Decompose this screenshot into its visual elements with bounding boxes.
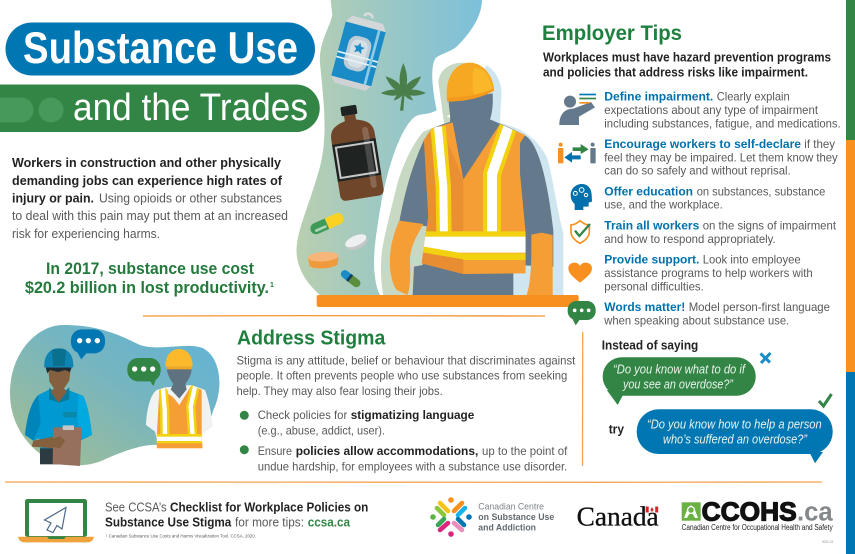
tip: define impairment: Clearly explain: [717, 91, 790, 104]
stigma definition: people. It often prevents people who use substances from seeking: [236, 369, 567, 383]
logo: CCSA: and Addiction: [478, 522, 536, 533]
bullet: check policies: Check policies for: [258, 408, 347, 422]
heading: address stigma: Address Stigma: [237, 327, 386, 349]
logo: CCOHS: .ca: [797, 499, 834, 527]
logo: Canada wordmark: Canada: [577, 502, 659, 532]
footer call to action: [105, 500, 368, 530]
tip: train all workers: Train all workers: [604, 220, 699, 233]
icon: presenter: [559, 94, 596, 125]
speech bubble: what not to say: you see an overdose?”: [622, 377, 734, 391]
label: instead of saying: Instead of saying: [602, 338, 698, 352]
person in safety vest: [146, 349, 213, 450]
speech bubble: what to say: “Do you know how to help a person: [647, 418, 822, 432]
side colour bar: [846, 0, 855, 554]
icon: green check: [819, 394, 832, 406]
statistic callout: 1: [270, 282, 274, 289]
icon: cannabis leaf: [381, 63, 426, 111]
speech bubble: what to say: who’s suffered an overdose?”: [663, 432, 808, 446]
illustration: worker with substances: [297, 0, 579, 307]
intro paragraph: Using opioids or other substances: [99, 190, 282, 206]
safety vest: [420, 120, 530, 277]
tip: words matter: Model person-first language: [689, 301, 830, 314]
intro paragraph: [12, 155, 288, 241]
tip: provide support: Provide support.: [604, 254, 699, 267]
CCSA mark: [430, 497, 472, 537]
tip: words matter: [568, 301, 830, 327]
tip: define impairment: expectations about any type of impairment: [604, 104, 819, 117]
work table: [317, 295, 579, 307]
title: substance use: Substance Use: [23, 24, 298, 73]
bullet: ensure policies: up to the point of: [482, 444, 568, 458]
intro paragraph: injury or pain.: [12, 190, 94, 206]
tip: self-declare: can do so safely and without reprisal.: [604, 165, 791, 178]
icon: heart: [568, 263, 592, 283]
speech bubble: green: [127, 358, 161, 386]
worker halo: green: [381, 63, 473, 295]
tip: define impairment: [559, 91, 841, 130]
bullet: ensure policies: undue hardship, for employees with a substance use disorder.: [258, 459, 567, 473]
bullet: ensure policies: Ensure: [258, 444, 292, 458]
tip: words matter: when speaking about substance use.: [603, 314, 789, 327]
statistic callout: In 2017, substance use cost: [46, 260, 254, 278]
logo: CCOHS: CCOHS: [702, 499, 797, 527]
stigma definition: help. They may also fear losing their jobs.: [236, 384, 443, 398]
tip: offer education: Offer education: [604, 185, 693, 198]
logo: CCSA: [430, 497, 554, 537]
icon: pills: [307, 211, 369, 289]
tip: self-declare: Encourage workers to self-declare: [604, 138, 802, 151]
illustration: two workers talking: [10, 325, 219, 466]
stigma definition: Stigma is any attitude, belief or behaviour that discriminates against: [236, 353, 576, 367]
tip: define impairment: Define impairment.: [604, 91, 713, 104]
employer tips intro: [543, 50, 831, 80]
tip: define impairment: including substances, fatigue, and medications.: [604, 117, 841, 130]
tip: words matter: Words matter!: [604, 301, 685, 314]
statistic callout: $20.2 billion in lost productivity.: [25, 279, 269, 297]
title: and the trades: and the Trades: [73, 87, 308, 129]
footer call to action: for more tips:: [235, 516, 304, 530]
tip: provide support: [568, 254, 813, 293]
document date code: 2021-03: [822, 540, 833, 544]
heading: employer tips: Employer Tips: [542, 21, 682, 45]
icon: shield with check: [571, 221, 590, 243]
stigma definition: [236, 353, 576, 398]
worker hard hat: [447, 63, 494, 102]
icon: speech bubble: [568, 301, 596, 325]
label: try: try: [609, 423, 624, 437]
logo: CCOHS: [682, 499, 834, 532]
tip: train all workers: on the signs of impairment: [703, 220, 837, 233]
tip: provide support: personal difficulties.: [604, 280, 704, 293]
tip: offer education: on substances, substance: [697, 185, 825, 198]
icon: beer can: [330, 8, 389, 92]
tip: self-declare: if they: [804, 138, 835, 151]
bullet: ensure policies: policies allow accommodations,: [296, 444, 478, 458]
bullet: check policies: [240, 408, 475, 437]
bullet: ensure policies: [240, 444, 568, 473]
title: and the trades: [0, 84, 320, 132]
tip: offer education: use, and the workplace.: [604, 199, 723, 212]
speech bubble: blue: [71, 329, 105, 359]
icon: head with gears: [571, 184, 592, 210]
icon: two people exchanging arrows: [558, 143, 596, 163]
footnote: ¹ Canadian Substance Use Costs and Harms Visualization Tool. CCSA, 2020.: [106, 533, 256, 538]
tip: train all workers: and how to respond appropriately.: [604, 233, 776, 246]
footer call to action: Checklist for Workplace Policies on: [170, 500, 368, 514]
gloves: [390, 221, 553, 295]
intro paragraph: Workers in construction and other physically: [12, 155, 282, 170]
intro paragraph: risk for experiencing harms.: [12, 226, 160, 241]
intro paragraph: to deal with this pain may put them at an increased: [12, 208, 288, 223]
bullet: check policies: stigmatizing language: [351, 408, 475, 422]
statistic callout: [25, 260, 274, 297]
background blob: [297, 0, 482, 295]
footer call to action: See CCSA’s: [105, 500, 167, 514]
tip: self-declare: [558, 138, 838, 178]
icon: laptop with cursor: [18, 499, 94, 542]
speech bubble: what to say: [637, 409, 833, 463]
logo: CCSA: Canadian Centre: [478, 501, 544, 512]
tip: offer education: [571, 184, 825, 212]
background blob: [10, 325, 219, 465]
tip: train all workers: [571, 220, 837, 246]
icon: medicine bottle: [326, 102, 384, 202]
speech bubble: what not to say: [603, 357, 756, 405]
employer tips intro: and policies that address risks like impairment.: [543, 66, 808, 80]
tip: self-declare: feel they may be impaired. Let them know they: [604, 151, 838, 164]
tip: provide support: Look into employee: [703, 254, 801, 267]
employer tips intro: Workplaces must have hazard prevention programs: [543, 50, 831, 64]
person with clipboard: [25, 348, 92, 466]
footer call to action: ccsa.ca: [308, 516, 351, 530]
intro paragraph: demanding jobs can experience high rates of: [12, 173, 283, 188]
footer call to action: Substance Use Stigma: [105, 516, 232, 530]
bullet: check policies: (e.g., abuse, addict, user).: [258, 423, 385, 437]
tip: provide support: assistance programs to help workers with: [604, 267, 813, 280]
speech bubble: what not to say: “Do you know what to do if: [613, 362, 746, 376]
logo: CCSA: on Substance Use: [478, 512, 554, 523]
worker halo: blue: [433, 65, 563, 295]
icon: blue x: [760, 353, 770, 363]
worker body: [399, 93, 553, 295]
